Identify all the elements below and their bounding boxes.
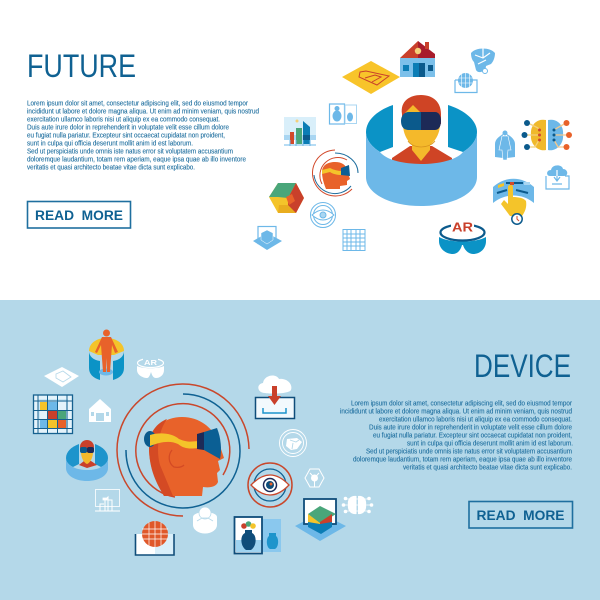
icon: vases xyxy=(330,104,356,124)
icon: hand hologram xyxy=(471,48,495,74)
icon: cube on platform xyxy=(253,226,282,250)
icon: white head on disc xyxy=(193,507,217,534)
icon: city chart xyxy=(284,117,316,146)
icon: circuit brain xyxy=(522,120,572,150)
icon: white diamond plan xyxy=(44,367,79,387)
panel: future xyxy=(0,0,600,300)
title: device: DEVICE xyxy=(474,348,571,384)
text block: future body: Sed ut perspiciatis unde omnis iste natus error sit voluptatem accusantium xyxy=(27,146,233,156)
text block: device body: Lorem ipsum dolor sit amet, consectetur adipiscing elit, sed do eiusmod tempor xyxy=(351,398,573,408)
icon: AR glasses: AR xyxy=(452,220,474,234)
icon: house xyxy=(400,41,435,77)
icon: white brain xyxy=(342,496,373,514)
text block: device body: exercitation ullamco laboris nisi ut aliquip ex ea commodo consequat. xyxy=(379,414,572,424)
icon: white hand hologram circle xyxy=(280,430,306,456)
icon: white house xyxy=(89,399,111,422)
text block: device body: Sed ut perspiciatis unde omnis iste natus error sit voluptatem accusantium xyxy=(366,446,572,456)
button: read more xyxy=(28,202,130,228)
icon: white city chart xyxy=(95,490,120,511)
text block: future body: incididunt ut labore et dolore magna aliqua. Ut enim ad minim veniam, quis nostrud xyxy=(27,106,259,116)
icon: AR glasses xyxy=(439,220,486,254)
text block: future body xyxy=(27,98,259,172)
icon: tablet with cube xyxy=(295,499,346,541)
icon: grid xyxy=(343,230,365,250)
icon: eye in circle xyxy=(310,202,336,228)
button: read more xyxy=(469,502,572,528)
icon: hexagonal cube xyxy=(269,183,304,213)
icon: white AR glasses: AR xyxy=(144,358,158,367)
panel: device xyxy=(0,300,600,600)
text block: device body xyxy=(340,398,573,472)
text block: future body: Duis aute irure dolor in reprehenderit in voluptate velit esse cillum dolore xyxy=(27,122,229,132)
icon: color grid xyxy=(34,395,72,434)
icon: globe on tablet xyxy=(455,73,477,92)
icon: large head with VR and rings xyxy=(117,384,249,516)
icon: body scan cylinder xyxy=(89,330,124,380)
button: read more: READ MORE xyxy=(476,508,564,523)
text block: device body: doloremque laudantium, totam rem aperiam, eaque ipsa quae ab illo inventore xyxy=(353,454,572,464)
icon: cloud download xyxy=(256,376,294,418)
text block: device body: veritatis et quasi architecto beatae vitae dicta sunt explicabo. xyxy=(403,462,572,472)
button: read more: READ MORE xyxy=(35,208,123,223)
icon: tablet with vases xyxy=(234,517,281,554)
text block: future body: eu fugiat nulla pariatur. Excepteur sint occaecat cupidatat non proident, xyxy=(27,130,225,140)
icon: cloud upload xyxy=(546,165,569,189)
icon: body hologram xyxy=(495,130,515,160)
text block: future body: veritatis et quasi architecto beatae vitae dicta sunt explicabo. xyxy=(27,162,195,172)
icon: touch screen hand xyxy=(493,179,534,224)
text block: device body: sunt in culpa qui officia deserunt mollit anim id est laborum. xyxy=(407,438,573,448)
text block: future body: Lorem ipsum dolor sit amet, consectetur adipiscing elit, sed do eiusmod tempor xyxy=(27,98,249,108)
icon: VR person in cylinder xyxy=(366,95,477,206)
text block: future body: doloremque laudantium, totam rem aperiam, eaque ipsa quae ab illo inventore xyxy=(27,154,246,164)
icon: head with VR in rings xyxy=(312,150,358,196)
icon: white AR glasses xyxy=(137,357,164,378)
text block: device body: Duis aute irure dolor in reprehenderit in voluptate velit esse cillum dolore xyxy=(369,422,572,432)
icon: globe on tablet xyxy=(136,521,174,555)
icon: VR person cylinder xyxy=(66,440,108,481)
icon: yellow diamond house plan xyxy=(342,61,400,94)
icon: white hexagon xyxy=(305,469,324,487)
title: future: FUTURE xyxy=(27,48,136,84)
icon: eye in rings xyxy=(248,463,292,507)
text block: future body: sunt in culpa qui officia deserunt mollit anim id est laborum. xyxy=(27,138,193,148)
text block: device body: incididunt ut labore et dolore magna aliqua. Ut enim ad minim veniam, quis nostrud xyxy=(340,406,572,416)
text block: future body: exercitation ullamco laboris nisi ut aliquip ex ea commodo consequat. xyxy=(27,114,220,124)
text block: device body: eu fugiat nulla pariatur. Excepteur sint occaecat cupidatat non proident, xyxy=(373,430,572,440)
